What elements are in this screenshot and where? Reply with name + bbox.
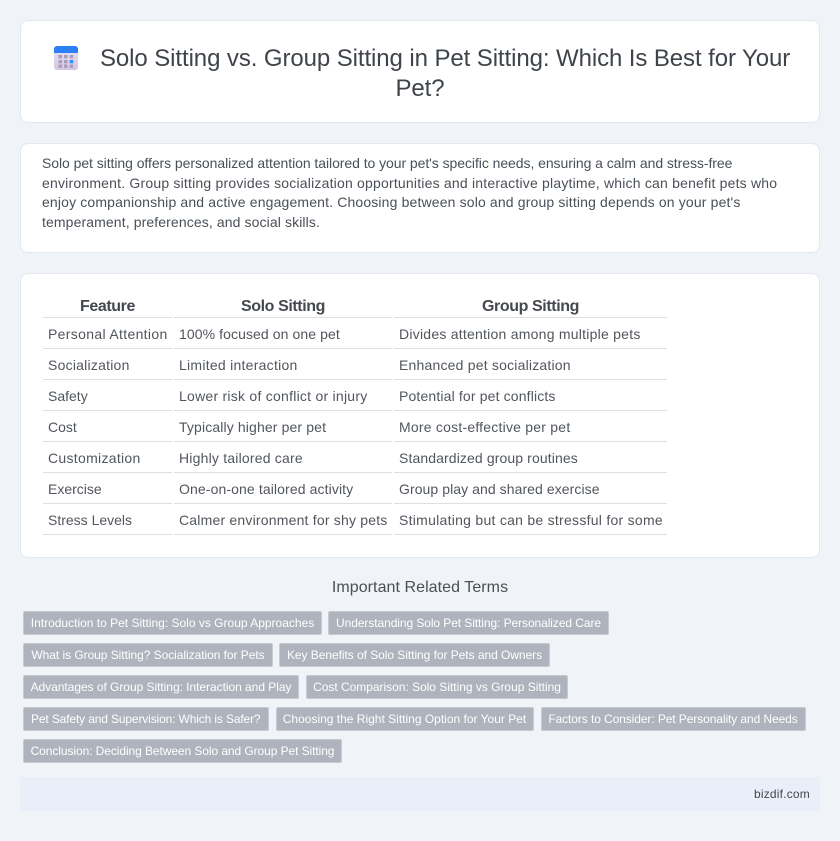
chip: Choosing the Right Sitting Option for Your Pet [283,712,526,726]
chip [23,675,299,699]
chip: Factors to Consider: Pet Personality and Needs [548,712,798,726]
comparison table [43,298,667,535]
header: Solo Sitting: Solo Sitting [241,298,325,315]
comparison table: Stimulating but can be stressful for some [399,512,663,528]
comparison table: Highly tailored care [179,450,303,466]
chip: Pet Safety and Supervision: Which is Safer? [31,712,260,726]
chip: Conclusion: Deciding Between Solo and Group Pet Sitting [31,744,334,758]
chip [279,643,550,667]
comparison table: One-on-one tailored activity [179,481,353,497]
comparison table: 100% focused on one pet [179,326,340,342]
comparison table: Customization [48,450,141,466]
comparison table: Safety [48,388,88,404]
header: Feature: Feature [80,298,135,315]
intro text [42,155,777,230]
heading: related terms: Important Related Terms [332,579,508,596]
footer bar [20,777,820,811]
panel: comparison table card [20,273,820,558]
chip: Understanding Solo Pet Sitting: Personalized Care [336,616,601,630]
chip [306,675,568,699]
title [100,45,790,102]
footer: site name: bizdif.com [754,787,810,801]
chip: What is Group Sitting? Socialization for Pets [31,648,265,662]
chip [23,611,322,635]
chips: related terms [23,611,806,763]
comparison table: Divides attention among multiple pets [399,326,641,342]
chip: Cost Comparison: Solo Sitting vs Group Sitting [313,680,561,694]
comparison table: Cost [48,419,77,435]
comparison table: Limited interaction [179,357,298,373]
icon: calendar [54,46,78,70]
chip [540,707,806,731]
title: Solo Sitting vs. Group Sitting in Pet Sitting: Which Is Best for Your [100,45,790,72]
chip: Introduction to Pet Sitting: Solo vs Group Approaches [31,616,314,630]
comparison table: Socialization [48,357,130,373]
comparison table: Standardized group routines [399,450,578,466]
comparison table: Enhanced pet socialization [399,357,571,373]
comparison table: Lower risk of conflict or injury [179,388,368,404]
comparison table: Personal Attention [48,326,168,342]
comparison table: More cost-effective per pet [399,419,570,435]
title: Pet? [395,74,444,102]
panel: title card [20,20,820,123]
chip: Advantages of Group Sitting: Interaction and Play [31,680,291,694]
comparison table: Stress Levels [48,512,132,528]
chip [276,707,534,731]
chip: Key Benefits of Solo Sitting for Pets and Owners [287,648,542,662]
intro text: temperament, preferences, and social skills. [42,214,320,230]
chip [23,707,268,731]
comparison table: Typically higher per pet [179,419,326,435]
chip [23,643,273,667]
comparison table: Group play and shared exercise [399,481,600,497]
comparison table: Potential for pet conflicts [399,388,556,404]
panel: intro text card [20,143,820,253]
intro text: Solo pet sitting offers personalized attention tailored to your pet's specific needs, ensuring a calm and stress-free [42,155,732,171]
comparison table: Calmer environment for shy pets [179,512,388,528]
comparison table: Exercise [48,481,102,497]
intro text: environment. Group sitting provides socialization opportunities and interactive playtime, which can benefit pets who [42,175,777,191]
intro text: enjoy companionship and active engagement. Choosing between solo and group sitting depends on your pet's [42,194,741,210]
chip [23,739,342,763]
chip [328,611,609,635]
header: Group Sitting: Group Sitting [482,298,579,315]
